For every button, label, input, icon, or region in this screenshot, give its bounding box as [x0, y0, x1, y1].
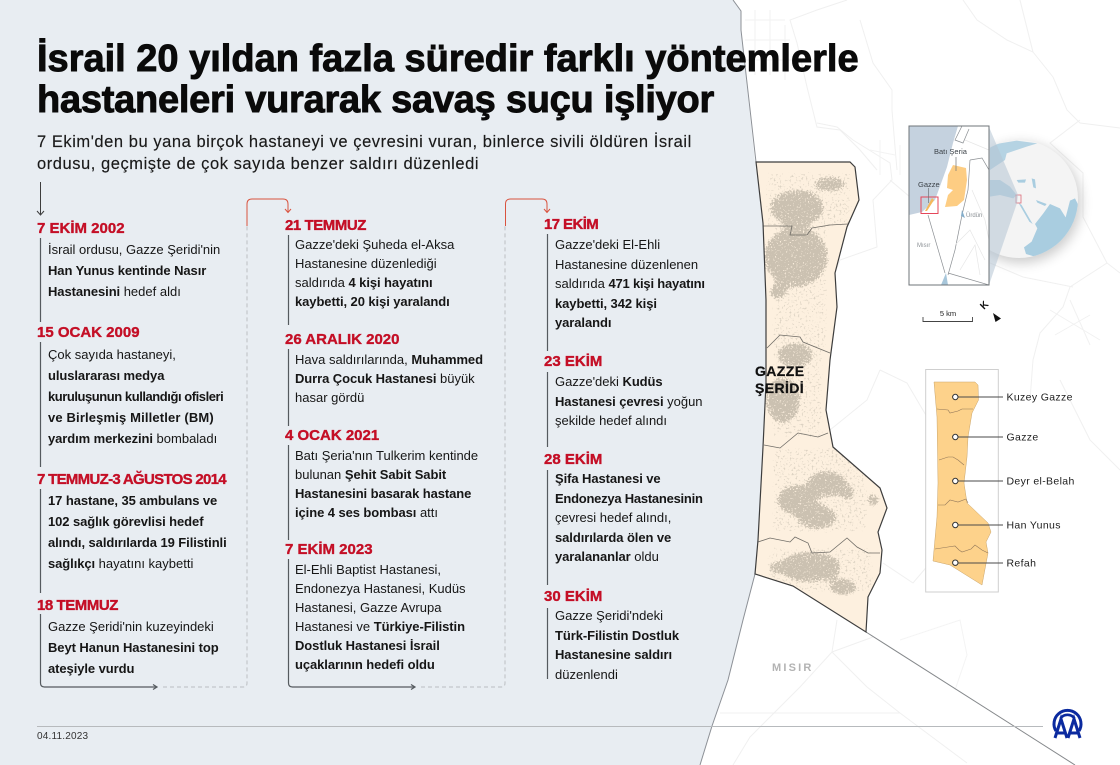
text: Durra Çocuk Hastanesi büyük	[295, 370, 475, 386]
text: yardım merkezini bombaladı	[48, 430, 217, 446]
red locator box	[921, 197, 938, 214]
text: Hava saldırılarında, Muhammed	[295, 352, 483, 366]
district labels: Kuzey Gazze	[1006, 392, 1073, 404]
timeline connector: start arrow	[37, 182, 44, 215]
red arrow to column 3	[506, 199, 550, 226]
text: 17 hastane, 35 ambulans ve	[48, 492, 217, 508]
title: hastaneleri vurarak savaş suçu işliyor	[37, 78, 714, 120]
text: çevresi hedef alındı,	[555, 510, 671, 525]
district labels: Deyr el-Belah	[1006, 476, 1075, 488]
Mısır border line	[866, 632, 1075, 765]
text	[555, 374, 703, 428]
text: kuruluşunun kullandığı ofisleri	[48, 388, 223, 404]
text	[48, 492, 227, 570]
date: 7 EKİM 2002	[37, 220, 125, 237]
timeline connector: column 1	[40, 226, 247, 690]
subtitle	[37, 132, 692, 173]
text: yaralananlar oldu	[555, 549, 659, 564]
inset frame	[909, 126, 989, 285]
text: sağlıkçı hayatını kaybetti	[48, 556, 193, 570]
district labels: Refah	[1006, 558, 1036, 570]
text: Hastanesine düzenlediği	[295, 256, 437, 270]
date: 7 EKİM 2023	[285, 541, 373, 558]
date: 4 OCAK 2021	[285, 427, 379, 444]
event: 28 Ekim	[544, 451, 703, 564]
text: Hastanesine saldırı	[555, 647, 672, 662]
event: 30 Ekim	[544, 588, 680, 682]
district borders	[935, 409, 988, 553]
Dead Sea / Gulf	[941, 273, 948, 285]
text: Hastanesi, Gazze Avrupa	[295, 600, 441, 614]
event: 26 Aralık 2020	[285, 331, 483, 404]
Gaza Strip map	[755, 162, 887, 632]
text: uçaklarının hedefi oldu	[295, 656, 435, 672]
event: 21 Temmuz	[285, 217, 454, 308]
date: 15 OCAK 2009	[37, 324, 140, 341]
event: 7 Ekim 2002	[37, 220, 220, 298]
AA logo	[1054, 710, 1081, 738]
text: Gazze Şeridi'ndeki	[555, 608, 663, 623]
text: kaybetti, 20 kişi yaralandı	[295, 294, 450, 308]
north arrow	[978, 299, 1001, 322]
text: bulunan Şehit Sabit Sabit	[295, 466, 446, 482]
text: saldırıda 4 kişi hayatını	[295, 274, 433, 290]
sea panel	[0, 0, 766, 765]
text: Hastanesi ve Türkiye-Filistin	[295, 618, 465, 634]
date: 26 ARALIK 2020	[285, 331, 400, 348]
text: İsrail ordusu, Gazze Şeridi'nin	[48, 242, 220, 256]
text: Hastanesi çevresi yoğun	[555, 394, 703, 409]
text: Gazze'deki Şuheda el-Aksa	[295, 236, 454, 252]
date: 23 EKİM	[544, 353, 602, 370]
text: uluslararası medya	[48, 368, 164, 382]
locator inset map	[909, 126, 989, 285]
footer rule	[37, 726, 1043, 728]
event: 15 Ocak 2009	[37, 324, 223, 446]
text	[295, 352, 483, 404]
subtitle: 7 Ekim'den bu yana birçok hastaneyi ve çevresini vuran, binlerce sivili öldüren İsrail	[37, 133, 692, 151]
text: içine 4 ses bombası attı	[295, 504, 438, 520]
title: İsrail 20 yıldan fazla süredir farklı yöntemlerle	[37, 38, 859, 80]
text: düzenlendi	[555, 667, 618, 682]
text: Beyt Hanun Hastanesini top	[48, 640, 219, 654]
text	[295, 562, 466, 672]
text: ateşiyle vurdu	[48, 660, 134, 676]
text: Han Yunus kentinde Nasır	[48, 262, 206, 278]
text: alındı, saldırılarda 19 Filistinli	[48, 534, 227, 550]
text	[295, 236, 454, 308]
label: Gazze Şeridi: GAZZE	[755, 363, 804, 379]
red arrow to column 2	[247, 199, 291, 226]
text: Gazze Şeridi'nin kuzeyindeki	[48, 618, 214, 634]
inset labels	[917, 147, 982, 249]
governorate borders	[758, 224, 880, 553]
district map	[926, 370, 1075, 592]
date: 28 EKİM	[544, 451, 602, 468]
date: 21 TEMMUZ	[285, 217, 366, 234]
Gaza locator	[925, 198, 934, 211]
text	[555, 237, 705, 330]
text: Dostluk Hastanesi İsrail	[295, 638, 440, 652]
text: şekilde hedef alındı	[555, 413, 667, 428]
inset labels: Gazze	[918, 180, 940, 189]
scale bar	[923, 309, 972, 322]
event: 7 Temmuz-3 Ağustos 2014	[37, 470, 227, 570]
event: 7 Ekim 2023	[285, 541, 466, 672]
text	[48, 346, 223, 446]
text: ve Birleşmiş Milletler (BM)	[48, 410, 214, 424]
text	[555, 608, 680, 682]
text: hasar gördü	[295, 390, 364, 404]
date: 7 TEMMUZ-3 AĞUSTOS 2014	[37, 471, 226, 488]
text: El-Ehli Baptist Hastanesi,	[295, 562, 441, 576]
inset labels: Ürdün	[966, 212, 982, 219]
text: Batı Şeria'nın Tulkerim kentinde	[295, 448, 478, 462]
north arrow: K	[978, 299, 992, 312]
text: 102 sağlık görevlisi hedef	[48, 514, 203, 528]
title	[37, 38, 859, 120]
text: Hastanesini hedef aldı	[48, 284, 181, 298]
text: Çok sayıda hastaneyi,	[48, 346, 176, 362]
subtitle: ordusu, geçmişte de çok sayıda benzer saldırı düzenledi	[37, 155, 479, 173]
text	[48, 618, 219, 676]
date: 30 EKİM	[544, 588, 602, 605]
text: saldırılarda ölen ve	[555, 530, 671, 545]
text: saldırıda 471 kişi hayatını	[555, 276, 705, 291]
text: Gazze'deki El-Ehli	[555, 237, 660, 252]
locator wedge	[989, 127, 1018, 285]
district labels	[1006, 392, 1075, 570]
West Bank	[945, 165, 967, 207]
event: 17 Ekim	[544, 216, 705, 330]
scale bar: 5 km	[940, 309, 956, 318]
event: 18 Temmuz	[37, 597, 219, 676]
inset borders	[928, 126, 989, 285]
strip outline	[755, 162, 887, 632]
text: Endonezya Hastanesi, Kudüs	[295, 580, 466, 596]
coast line	[700, 0, 756, 765]
text: yaralandı	[555, 315, 611, 330]
district labels: Gazze	[1006, 432, 1039, 444]
inset sea	[909, 126, 958, 215]
label: Gazze Şeridi: ŞERİDİ	[755, 380, 804, 396]
inset labels: Batı Şeria	[934, 147, 968, 156]
text: Hastanesine düzenlenen	[555, 257, 698, 272]
text: Gazze'deki Kudüs	[555, 374, 663, 389]
text: Türk-Filistin Dostluk	[555, 628, 679, 643]
timeline connector: column 2	[288, 226, 505, 690]
event: 23 Ekim	[544, 353, 703, 428]
globe locator	[990, 138, 1086, 268]
text: Endonezya Hastanesinin	[555, 491, 703, 506]
road network	[720, 0, 1120, 765]
district leaders	[955, 397, 1003, 563]
timeline connector: column 3	[546, 234, 548, 679]
district labels: Han Yunus	[1006, 520, 1061, 532]
text: Hastanesini basarak hastane	[295, 486, 471, 500]
location marker	[1016, 195, 1021, 203]
inset labels: Mısır	[917, 243, 930, 249]
date: 17 EKİM	[544, 216, 598, 233]
event: 4 Ocak 2021	[285, 427, 478, 520]
text	[48, 242, 220, 298]
text	[295, 448, 478, 520]
text: Şifa Hastanesi ve	[555, 471, 661, 486]
text	[555, 471, 703, 564]
date stamp: 04.11.2023	[37, 731, 88, 742]
label: Mısır: MISIR	[772, 662, 814, 674]
date: 18 TEMMUZ	[37, 597, 118, 614]
text: kaybetti, 342 kişi	[555, 296, 657, 311]
